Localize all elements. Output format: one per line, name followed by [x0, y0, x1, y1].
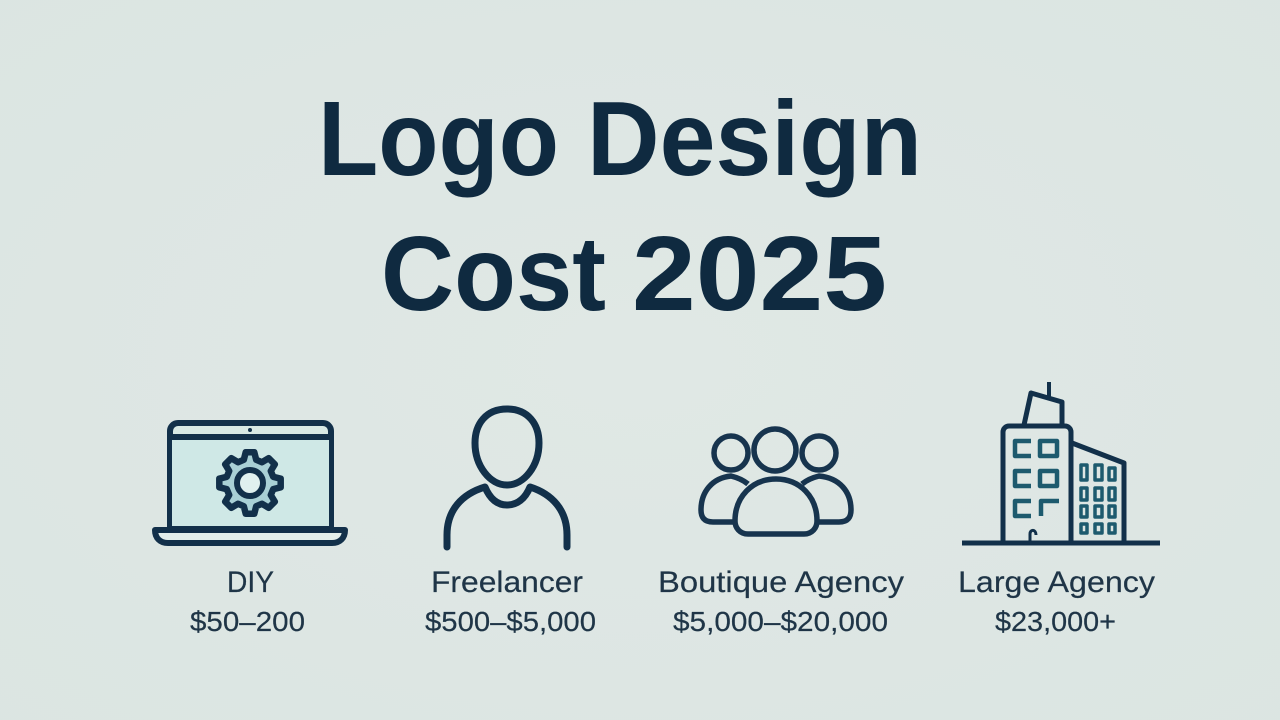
icon: large agency building [962, 382, 1160, 543]
icon: freelancer person [447, 409, 567, 547]
label: Boutique Agency: Boutique Agency [658, 566, 904, 599]
icon: laptop with gear [155, 423, 345, 543]
label: DIY [190, 566, 305, 637]
title: Cost [381, 215, 606, 333]
label: DIY: $50–200 [190, 606, 305, 637]
title: Design [587, 80, 922, 198]
label: Large Agency: Large Agency [958, 566, 1155, 599]
label: Boutique Agency [658, 566, 904, 637]
title [318, 80, 922, 333]
label: Freelancer: Freelancer [431, 566, 583, 599]
label: Freelancer [425, 566, 596, 637]
title: Logo [318, 80, 559, 198]
label: Large Agency [958, 566, 1155, 637]
label: DIY: DIY [227, 566, 274, 599]
icon: boutique agency group [701, 429, 851, 534]
label: Freelancer: $500–$5,000 [425, 606, 596, 637]
label: Large Agency: $23,000+ [995, 606, 1116, 637]
title: 2025 [632, 215, 887, 333]
label: Boutique Agency: $5,000–$20,000 [673, 606, 888, 637]
